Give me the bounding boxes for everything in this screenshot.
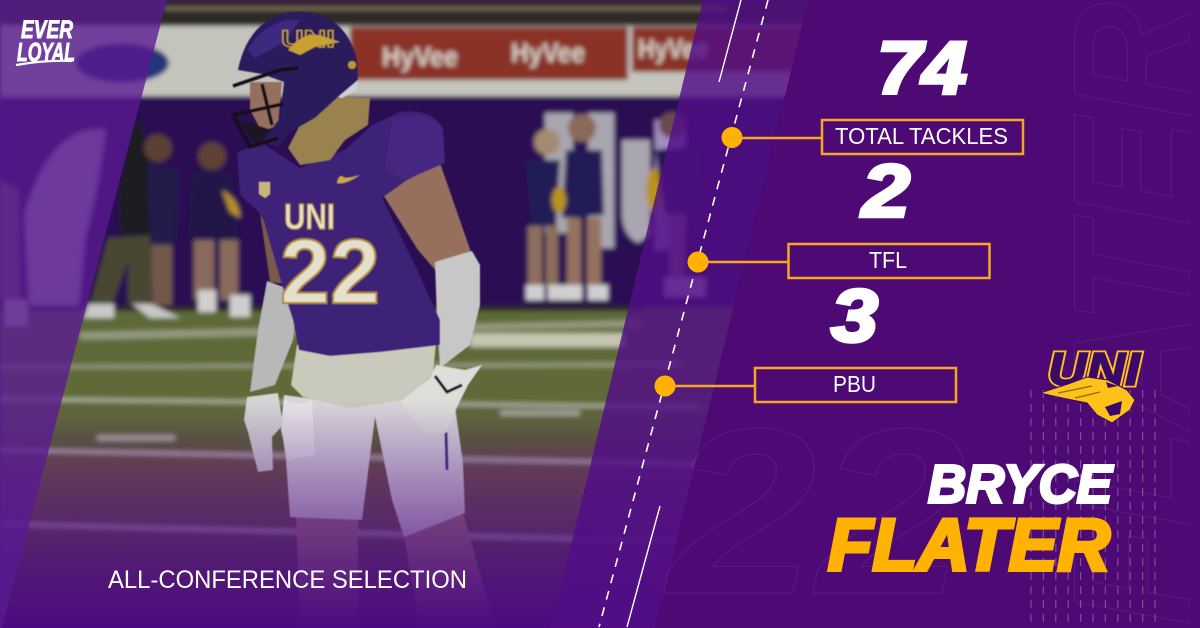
player: left sleeve [250, 281, 297, 392]
right group [534, 129, 560, 155]
left group [118, 118, 165, 235]
player: helmet logo: UNI [281, 26, 335, 53]
background photo: arena: HyVee [382, 41, 458, 72]
solid diagonal line bottom [627, 506, 660, 627]
label box: PBU [833, 371, 876, 397]
label box: TOTAL TACKLES [835, 123, 1008, 149]
player first name: BRYCE [928, 454, 1114, 514]
stat number 74: 74 [877, 26, 967, 110]
logo: Ever Loyal: LOYAL [17, 37, 75, 67]
player: right leg [296, 512, 358, 628]
cheerleaders [0, 112, 705, 326]
wall letters [545, 113, 573, 233]
player: face mask [233, 68, 298, 147]
connector dot [654, 376, 676, 396]
stat number 2: 2 [860, 150, 910, 232]
label box [755, 368, 956, 402]
logo: Ever Loyal: EVER [21, 16, 73, 44]
bottom purple fade [0, 400, 760, 628]
player: right sleeve [435, 251, 480, 368]
dashed line grid [1031, 390, 1155, 627]
player: right arm [382, 163, 472, 272]
label box [822, 120, 1023, 154]
logo: Ever Loyal [16, 16, 75, 67]
connector line [665, 385, 755, 387]
stat: TFL [688, 150, 990, 278]
stat: total tackles [722, 26, 1023, 154]
icon: jersey patch [259, 182, 270, 198]
player photo [233, 12, 495, 628]
player: pants [281, 385, 465, 537]
stat number 3: 3 [831, 274, 878, 358]
translucent middle band [551, 0, 808, 628]
caption: all-conference selection: ALL-CONFERENCE SELECTION [108, 566, 467, 594]
player: helmet [238, 12, 358, 147]
player: left leg [403, 495, 495, 628]
player: hair [288, 97, 370, 165]
connector dot [688, 252, 708, 272]
right solid panel [655, 0, 1200, 628]
player: undershirt [291, 342, 436, 408]
background photo: arena: HyVee [638, 33, 708, 64]
player: left glove [244, 393, 283, 472]
left purple overlay panel [0, 0, 167, 628]
dashed diagonal line [599, 0, 768, 627]
connector line [698, 261, 788, 263]
stat: PBU [654, 274, 956, 402]
label box: TFL [869, 247, 907, 273]
connector line [732, 137, 822, 139]
player: jersey UNI lettering: UNI [284, 196, 335, 237]
background photo: arena: HyVee [511, 37, 585, 68]
solid diagonal line top [719, 0, 741, 82]
player last name: FLATER [828, 505, 1110, 586]
player: left arm [260, 213, 293, 285]
label box [788, 244, 990, 278]
logo: UNI panther: UNI [1048, 343, 1141, 395]
player: face [250, 82, 282, 132]
logo: UNI panther: UNI [1048, 343, 1141, 395]
icon: nike swoosh [337, 175, 360, 183]
logo: UNI panther [1040, 343, 1141, 423]
connector dot [722, 127, 742, 148]
player: jersey number: 22 [280, 221, 380, 323]
player: jersey [237, 111, 445, 356]
player: right glove [400, 365, 482, 433]
